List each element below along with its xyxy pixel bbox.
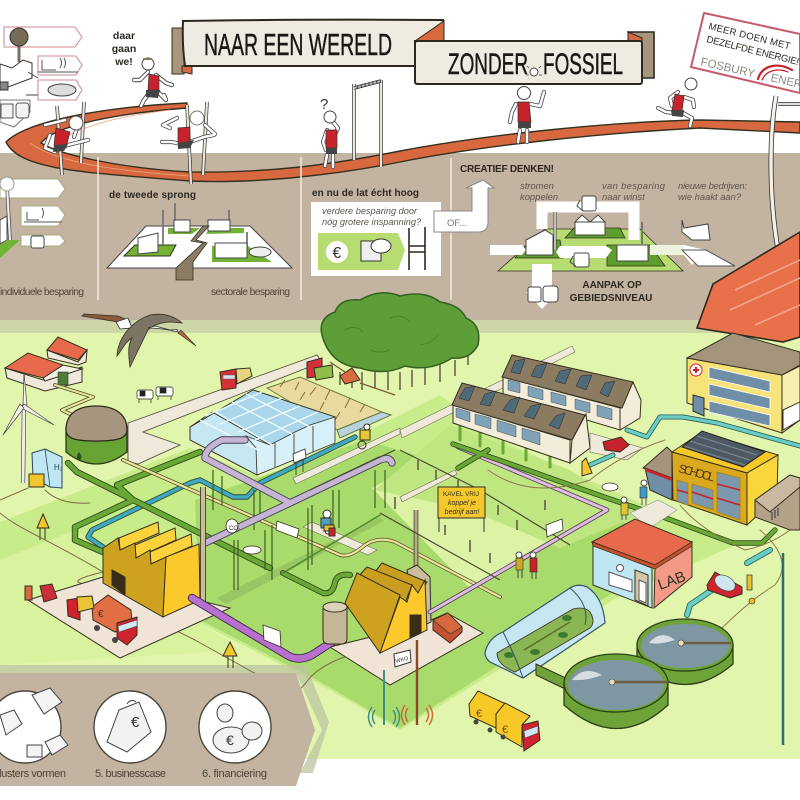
- text: van besparing naar winst: naar winst: [602, 191, 645, 202]
- panel: higher effort box: nóg grotere inspanning?: [322, 217, 422, 227]
- arrow: of: [434, 180, 494, 232]
- hydrogen box: [29, 449, 63, 488]
- text: nieuwe bedrijven: wie haakt aan?: [678, 191, 742, 202]
- cows: [137, 387, 173, 403]
- heading: de tweede sprong: de tweede sprong: [109, 190, 196, 201]
- pipe: lilac to village: [430, 447, 607, 612]
- euro trucks at bottom: [469, 691, 540, 751]
- small road signs: [226, 449, 618, 647]
- logo callout: fosbury energie: [691, 13, 800, 96]
- basin one: [564, 654, 668, 728]
- text: stromen koppelen: [520, 180, 558, 202]
- icon: cost kettle and drum bottom: [528, 286, 558, 302]
- terraced houses front row: [452, 383, 590, 463]
- logo callout: fosbury energie: MEER DOEN MET: [707, 21, 792, 52]
- pipe: lilac co2: [205, 440, 392, 543]
- euro trucks at bottom: €: [502, 724, 508, 736]
- heading: creatief denken: CREATIEF DENKEN!: [460, 164, 554, 175]
- small factory platform: [330, 613, 483, 685]
- entrance square: [630, 500, 677, 528]
- small factory: WKO: [395, 656, 410, 665]
- text: nieuwe bedrijven: [678, 180, 747, 202]
- title ribbon: zonder fossiel: [415, 21, 654, 84]
- label: daar gaan we: gaan: [112, 43, 136, 55]
- cable left: [0, 488, 350, 693]
- panel: first step individual savings: [0, 177, 84, 298]
- school: [643, 431, 800, 530]
- delivery truck and forklift: €: [98, 609, 104, 620]
- panel: higher effort box: verdere besparing door: [322, 206, 418, 216]
- label: daar gaan we: daar: [113, 30, 135, 42]
- second jump hurdle and runner: [162, 102, 215, 184]
- lab building: [592, 519, 692, 608]
- hospital: [687, 333, 800, 433]
- panel: tan strategy background: [0, 153, 800, 321]
- arrow: of: OF...: [447, 218, 467, 229]
- delivery truck and forklift: [25, 584, 137, 645]
- tractor and harvest machines: [307, 358, 395, 395]
- euro trucks at bottom: €: [476, 708, 482, 720]
- big roof at right edge: [697, 232, 800, 342]
- bottom panel shadow: [0, 665, 329, 773]
- basin two: [637, 619, 733, 684]
- stork: [82, 314, 196, 367]
- title ribbon: zonder fossiel: ZONDER: [448, 48, 528, 81]
- wind turbine: [3, 373, 54, 483]
- school: SCHOOL: [677, 461, 717, 485]
- warning sign middle: [223, 642, 237, 668]
- geothermal signal icons: [368, 640, 432, 727]
- thinking runner with question mark: [320, 96, 338, 167]
- landscape ground: [0, 320, 800, 759]
- high jump goal post: [354, 80, 381, 167]
- label: financiering: 6. financiering: [202, 768, 267, 780]
- roads in village: [293, 346, 643, 555]
- text: stromen koppelen: stromen: [520, 180, 554, 191]
- farm: [5, 337, 87, 391]
- truck on road with crops: [220, 368, 252, 390]
- diagram: sector platform with crack: [107, 203, 292, 298]
- bicycle riders: [321, 424, 370, 536]
- runner with idea: [510, 86, 544, 142]
- panel: higher effort box: [311, 202, 441, 276]
- car on right: [707, 572, 755, 604]
- text: nieuwe bedrijven: nieuwe bedrijven:: [678, 180, 747, 191]
- circle: businesscase: [94, 691, 166, 763]
- label: aanpak op gebiedsniveau: AANPAK OP: [582, 280, 642, 291]
- hurdle and jumper on the left: [45, 102, 88, 175]
- fences: [310, 450, 570, 580]
- pipe: cream heat: [123, 460, 500, 597]
- biogas digester: [66, 406, 127, 464]
- label: daar gaan we: we!: [114, 56, 133, 68]
- pipe supports: [213, 470, 385, 590]
- sign: kavel vrij: koppel je: [448, 500, 476, 507]
- thinking runner with question mark: ?: [320, 96, 328, 113]
- label: daar gaan we: [112, 30, 136, 68]
- pipe: teal lines: [590, 417, 800, 615]
- cable on right: [488, 440, 790, 630]
- icon group: individual company at top left: [0, 27, 82, 127]
- title ribbon: naar een wereld: [172, 20, 443, 74]
- small car and sign near houses: [582, 437, 629, 476]
- algae tunnel: [485, 585, 605, 688]
- panel: bottom process steps: [0, 673, 315, 786]
- greenhouse: [190, 390, 335, 475]
- sign: kavel vrij: bedrijf aan!: [445, 509, 479, 516]
- sign: kavel vrij: [438, 487, 485, 532]
- runner: top of track: [134, 58, 172, 106]
- title ribbon: zonder fossiel: FOSSIEL: [543, 48, 623, 81]
- label: individuele besparing: individuele besparing: [0, 287, 84, 298]
- label: sectorale besparing: sectorale besparing: [211, 287, 290, 298]
- sign text co2: CO₂: [229, 526, 241, 532]
- crop field: [267, 377, 391, 438]
- circle: financiering: €: [226, 732, 234, 748]
- pipe: green to school: [453, 425, 775, 543]
- tall pole beside factory: [200, 487, 206, 604]
- road: [128, 355, 322, 464]
- lab building: LAB: [656, 568, 688, 594]
- panel dividers: [98, 157, 451, 300]
- pipe: thin green and pipe green 3: [283, 515, 380, 593]
- running track: [6, 103, 800, 182]
- right vertical teal pipe: [782, 553, 784, 745]
- circle: financiering: [199, 691, 271, 763]
- label: aanpak op gebiedsniveau: GEBIEDSNIVEAU: [570, 293, 652, 304]
- text: van besparing naar winst: [602, 180, 666, 202]
- icon: cost kettle top: [577, 196, 596, 211]
- diagram: area level approach: [490, 196, 735, 309]
- icon: cost kettle centre: [570, 253, 589, 267]
- panel: higher effort box: €: [333, 245, 342, 262]
- title ribbon: naar een wereld: NAAR EEN WERELD: [204, 27, 392, 62]
- circle: clusters vormen: [0, 688, 68, 763]
- heading: en nu de lat echt hoog: en nu de lat écht hoog: [312, 188, 419, 199]
- logo callout: fosbury energie: DEZELFDE ENERGIE!: [705, 34, 800, 68]
- pipe: blue water: [88, 437, 355, 547]
- tall pole on the right: [771, 96, 800, 250]
- pipe: purple: [192, 598, 332, 658]
- text: van besparing naar winst: van besparing: [602, 180, 666, 191]
- small factory: [323, 510, 462, 667]
- people by school: [621, 480, 647, 520]
- terraced houses back row: [502, 355, 641, 430]
- hydrogen box: H₂: [54, 463, 63, 472]
- logo callout: fosbury energie: FOSBURY: [699, 56, 756, 80]
- farm feed pipe: [55, 385, 93, 415]
- pipe: green biogas: [68, 452, 270, 568]
- runner on the right: [658, 78, 697, 126]
- circle: businesscase: €: [131, 714, 140, 731]
- tree: [321, 293, 479, 390]
- label: aanpak op gebiedsniveau: [570, 280, 652, 304]
- warning sign: [37, 514, 49, 540]
- sign: kavel vrij: KAVEL VRIJ: [443, 491, 479, 498]
- text: stromen koppelen: koppelen: [520, 191, 558, 202]
- label: businesscase: 5. businesscase: [95, 768, 166, 780]
- large factory: [28, 522, 230, 658]
- people near lot: [516, 552, 537, 579]
